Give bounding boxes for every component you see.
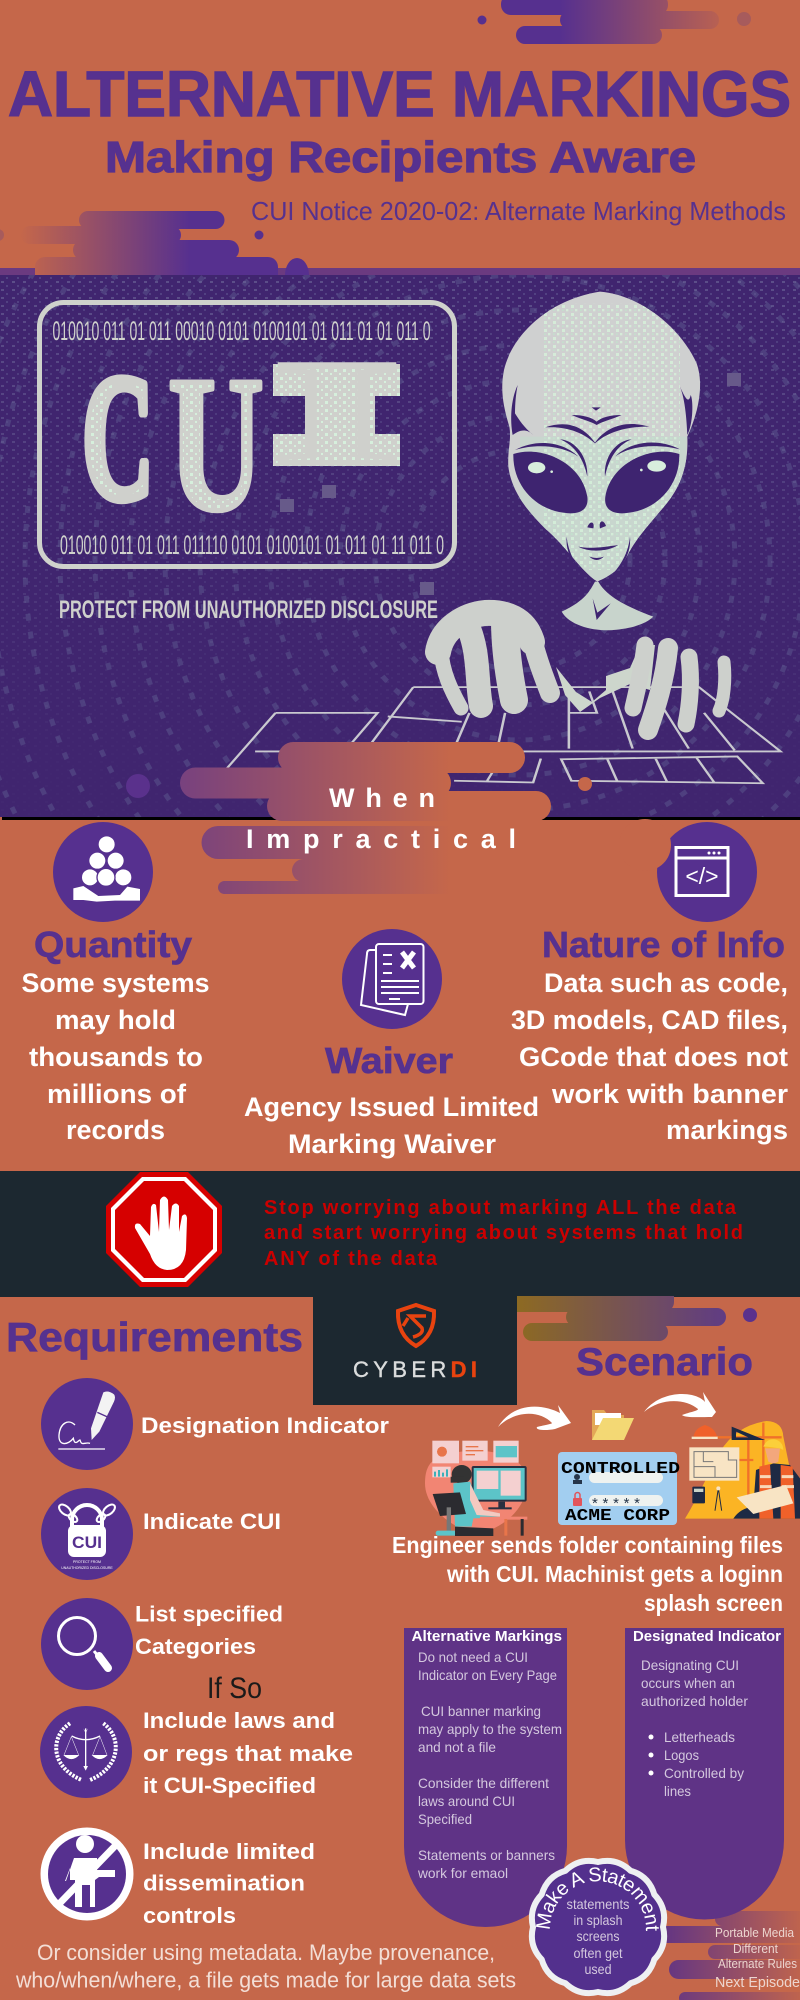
column: quantity xyxy=(22,822,210,1145)
text: nature of info body: 3D models, CAD files, xyxy=(511,1005,788,1035)
scenario description xyxy=(392,1532,783,1616)
label: or regs that make xyxy=(143,1741,353,1766)
badge: make a statement xyxy=(528,1858,668,1996)
password stars: ***** xyxy=(592,1495,640,1512)
panel body: Designating CUI xyxy=(641,1657,739,1673)
panel body: work for emaol xyxy=(417,1865,508,1881)
badge body xyxy=(566,1896,630,1977)
heading: requirements: Requirements xyxy=(6,1314,303,1360)
teaser: next episode: Portable Media xyxy=(715,1925,795,1940)
text: waiver body: Marking Waiver xyxy=(288,1129,496,1159)
banner heading line one: When xyxy=(329,783,435,813)
panel: alternative markings xyxy=(404,1628,567,1927)
icon: magnifying glass xyxy=(41,1598,133,1690)
stop message: and start worrying about systems that hold xyxy=(264,1222,743,1244)
icon: CUI padlock: CUI xyxy=(72,1533,102,1552)
requirement: designation indicator xyxy=(41,1378,389,1470)
decorative clouds: bottom right xyxy=(650,1911,800,2000)
notice reference: CUI Notice 2020-02: Alternate Marking Methods xyxy=(251,196,786,226)
text: nature of info body: Data such as code, xyxy=(544,968,788,998)
panel: designated indicator xyxy=(625,1628,784,1920)
metadata note xyxy=(15,1940,516,1992)
requirement: indicate CUI xyxy=(41,1488,281,1580)
column: waiver xyxy=(244,929,539,1159)
icon: code window xyxy=(619,819,757,922)
panel body: Letterheads xyxy=(664,1729,735,1745)
letter U: U xyxy=(168,336,264,551)
label: dissemination xyxy=(143,1870,305,1896)
keyboard outline xyxy=(227,687,781,783)
badge body: screens xyxy=(576,1928,620,1944)
panel body: CUI banner marking xyxy=(421,1703,541,1719)
stop message: ANY of the data xyxy=(264,1248,438,1270)
text: quantity body: records xyxy=(66,1115,165,1145)
icon: CUI padlock xyxy=(41,1488,133,1580)
label: Indicate CUI xyxy=(143,1509,281,1534)
metadata note: Or consider using metadata. Maybe provenance, xyxy=(37,1940,495,1965)
label: Designation Indicator xyxy=(141,1413,389,1438)
panel body: may apply to the system xyxy=(418,1721,562,1737)
panel body: laws around CUI xyxy=(418,1793,515,1809)
panel body xyxy=(641,1657,748,1799)
banner dots xyxy=(126,774,150,798)
alien head xyxy=(502,292,700,630)
dark band xyxy=(0,1171,800,1297)
badge body: statements xyxy=(566,1896,630,1912)
icon: folder xyxy=(592,1410,634,1440)
panel body: Indicator on Every Page xyxy=(418,1667,557,1683)
panel body: occurs when an xyxy=(641,1675,735,1691)
icon: code window: </> xyxy=(685,863,719,889)
stop message: Stop worrying about marking ALL the data xyxy=(264,1197,737,1219)
banner heading line two: Impractical xyxy=(246,824,516,854)
heading: scenario: Scenario xyxy=(576,1341,753,1384)
label: Categories xyxy=(135,1634,256,1659)
hero background xyxy=(0,275,800,817)
text: waiver body xyxy=(244,1092,539,1159)
label: it CUI-Specified xyxy=(143,1773,316,1798)
company label: ACME CORP xyxy=(565,1507,670,1526)
icon: no person xyxy=(40,1828,134,1920)
illustration: engineer at desk xyxy=(425,1441,527,1536)
text: quantity body: Some systems xyxy=(22,968,210,998)
text: nature of info body: markings xyxy=(666,1115,788,1145)
alien left hand xyxy=(438,613,550,708)
heading: waiver: Waiver xyxy=(325,1040,453,1081)
logo: CyberDI xyxy=(313,1296,517,1405)
icon: CUI padlock: PROTECT FROM xyxy=(73,1560,101,1564)
CUI marking frame xyxy=(40,302,454,566)
arrow: engineer to folder xyxy=(498,1405,571,1430)
icon: scales and laurel xyxy=(40,1706,132,1798)
panel body: authorized holder xyxy=(641,1693,748,1709)
icon: waiver document xyxy=(342,929,442,1029)
text: nature of info body xyxy=(511,968,788,1145)
requirement: list specified categories xyxy=(41,1598,283,1690)
letter C: C xyxy=(82,338,154,537)
scenario description: splash screen xyxy=(644,1590,783,1616)
label: Include laws and xyxy=(143,1708,335,1733)
controlled label: CONTROLLED xyxy=(561,1460,680,1479)
label: List specified xyxy=(135,1602,283,1626)
panel body: Do not need a CUI xyxy=(418,1649,528,1665)
badge body: in splash xyxy=(574,1912,622,1928)
banner clouds xyxy=(180,742,551,894)
text: nature of info body: work with banner xyxy=(551,1079,788,1109)
small grey squares xyxy=(280,373,741,595)
if so connector: If So xyxy=(207,1672,262,1705)
scenario description: with CUI. Machinist gets a loginn xyxy=(446,1561,783,1587)
badge body: often get xyxy=(574,1945,623,1961)
decorative clouds: top right xyxy=(478,0,751,44)
label: controls xyxy=(143,1903,236,1928)
teaser: next episode: Different xyxy=(733,1941,778,1956)
decorative clouds: scenario xyxy=(517,1296,757,1341)
label xyxy=(143,1708,353,1798)
requirement: dissemination controls xyxy=(40,1828,315,1928)
heading: quantity: Quantity xyxy=(34,924,192,965)
illustration: login splash screen xyxy=(558,1452,680,1526)
panel body: Specified xyxy=(418,1811,472,1827)
panel body: Controlled by xyxy=(664,1765,744,1781)
stop message xyxy=(264,1197,743,1270)
panel body: and not a file xyxy=(418,1739,496,1755)
matrix rain background xyxy=(1,277,800,698)
curved badge title: Make A Statement xyxy=(536,1867,659,1931)
panel body: Consider the different xyxy=(418,1775,549,1791)
black baseline strip xyxy=(2,817,800,820)
protect caption: PROTECT FROM UNAUTHORIZED DISCLOSURE xyxy=(59,596,438,624)
binary line bottom: 010010 011 01 011 011110 0101 0100101 01 011 01 11 011 0 xyxy=(60,530,444,560)
stop panel xyxy=(0,1171,800,1297)
text: nature of info body: GCode that does not xyxy=(519,1042,788,1072)
label: Include limited xyxy=(143,1839,315,1864)
text: quantity body: millions of xyxy=(47,1079,186,1109)
panel body: Statements or banners xyxy=(418,1847,555,1863)
teaser: next episode xyxy=(715,1925,800,1991)
panel body: Logos xyxy=(664,1747,699,1763)
panel heading: Designated Indicator xyxy=(633,1628,781,1645)
label xyxy=(135,1602,283,1659)
text: quantity body: may hold xyxy=(55,1005,176,1035)
illustration: machinist with plans xyxy=(685,1421,800,1519)
title: ALTERNATIVE MARKINGS xyxy=(8,58,791,130)
metadata note: who/when/where, a file gets made for large data sets xyxy=(15,1968,516,1992)
arrow: folder to machinist xyxy=(644,1392,716,1417)
requirement: laws and regs xyxy=(40,1706,353,1798)
label xyxy=(143,1839,315,1928)
logo: CyberDI: CYBERDI xyxy=(353,1357,477,1382)
badge body: used xyxy=(584,1961,612,1977)
icon: stop hand xyxy=(106,1172,222,1287)
letter I xyxy=(272,330,402,496)
text: quantity body: thousands to xyxy=(29,1042,203,1072)
scenario description: Engineer sends folder containing files xyxy=(392,1532,783,1558)
binary line top: 010010 011 01 011 00010 0101 0100101 01 011 01 01 011 0 xyxy=(52,316,431,346)
alien right hand xyxy=(556,645,725,730)
panel heading: Alternative Markings xyxy=(412,1628,562,1645)
panel body: lines xyxy=(664,1783,691,1799)
icon: signature pen xyxy=(41,1378,133,1470)
hero top band xyxy=(0,268,800,275)
banner: when impractical xyxy=(126,742,592,894)
text: waiver body: Agency Issued Limited xyxy=(244,1092,539,1122)
icon: coins in hands xyxy=(53,822,153,922)
panel body xyxy=(417,1649,562,1881)
letter I: I xyxy=(272,330,402,496)
icon: CUI padlock: UNAUTHORIZED DISCLOSURE xyxy=(61,1566,113,1570)
hero: CUI alien artwork panel xyxy=(0,268,800,820)
text: quantity body xyxy=(22,968,210,1145)
column: nature of info xyxy=(511,819,788,1145)
heading: nature of info: Nature of Info xyxy=(542,924,785,965)
binary swirl background xyxy=(0,275,800,817)
decorative clouds: left of title xyxy=(0,211,309,275)
subtitle: Making Recipients Aware xyxy=(105,133,696,182)
